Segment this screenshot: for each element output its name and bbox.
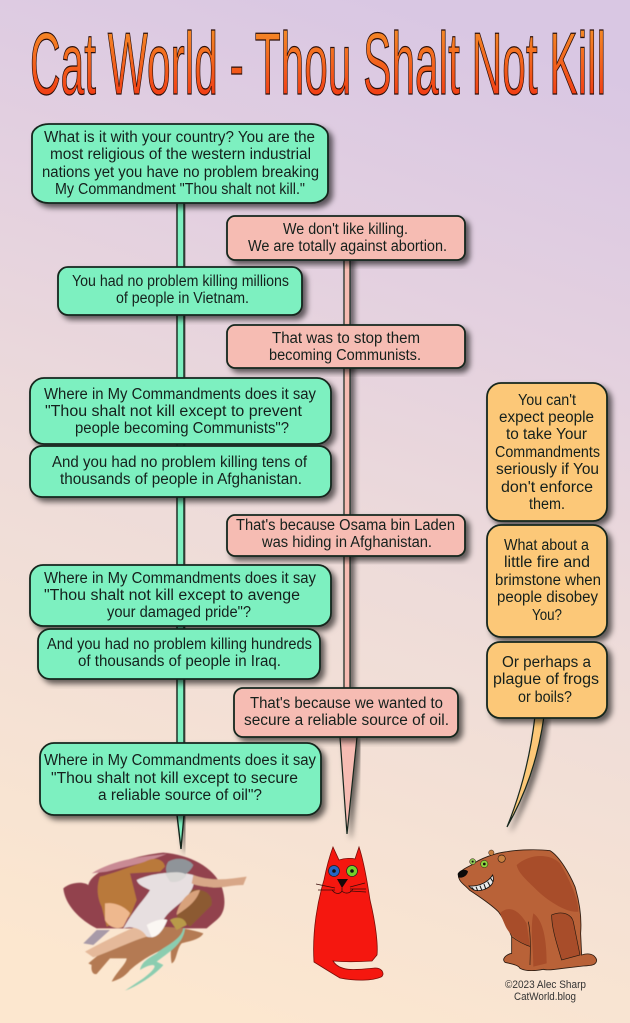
illustration: God in red cloak (63, 853, 247, 991)
bubble: Vietnam: You had no problem killing millions (72, 273, 289, 290)
bubble: stop them becoming Communists: becoming Communists. (269, 347, 421, 364)
bubble: prevent people becoming Communists: "Thou shalt not kill except to prevent (45, 403, 303, 420)
bubble: frogs or boils: Or perhaps a (502, 654, 591, 671)
green scarf (125, 928, 185, 991)
bubble: fire and brimstone: brimstone when (495, 572, 601, 589)
bear grin (469, 875, 493, 891)
bubble: Iraq (38, 629, 320, 679)
bubble: Vietnam: of people in Vietnam. (116, 290, 249, 307)
bubble: source of oil: That's because we wanted to (250, 695, 443, 712)
bubble: secure source of oil (40, 743, 321, 815)
bubble: stop them becoming Communists (227, 325, 465, 368)
illustration: brown bear (458, 850, 597, 971)
bubble: enforce commandments: seriously if You (496, 461, 599, 478)
bubble: what is it with your country (32, 124, 328, 203)
bubble: prevent people becoming Communists: Where in My Commandments does it say (44, 386, 316, 403)
bubble: avenge damaged pride (30, 565, 331, 626)
bubble: fire and brimstone: What about a (504, 537, 589, 554)
bubble: avenge damaged pride: "Thou shalt not kill except to avenge (44, 587, 300, 604)
bubble: we don't like killing: We are totally against abortion. (248, 238, 447, 255)
bubble: what is it with your country: My Commandment "Thou shalt not kill." (55, 181, 305, 198)
bubble: enforce commandments: don't enforce (501, 479, 593, 496)
bubble: prevent people becoming Communists (30, 378, 331, 444)
bubble: enforce commandments: them. (529, 496, 565, 513)
bubble: fire and brimstone (487, 525, 607, 637)
bear nose (458, 870, 468, 878)
bubble: avenge damaged pride: Where in My Commandments does it say (44, 570, 316, 587)
bubble: what is it with your country: most religious of the western industrial (50, 146, 311, 163)
bubble: source of oil: secure a reliable source of oil. (244, 712, 449, 729)
bubble: Iraq: And you had no problem killing hundreds (47, 636, 312, 653)
bubble: we don't like killing (227, 216, 465, 260)
illustration: red cat (314, 847, 383, 980)
credit (505, 979, 586, 1003)
bubble: what is it with your country: nations yet you have no problem breaking (42, 164, 319, 181)
bubble: Vietnam (58, 267, 302, 315)
bubble: fire and brimstone: You? (532, 607, 562, 624)
bubble: what is it with your country: What is it with your country? You are the (44, 129, 315, 146)
bubble: fire and brimstone: little fire and (504, 554, 590, 571)
bubble: enforce commandments: to take Your (506, 426, 587, 443)
cherubs (98, 859, 165, 927)
bubble: secure source of oil: "Thou shalt not kill except to secure (51, 770, 298, 787)
bear eyes and ears (470, 859, 476, 865)
bubble: Afghanistan: thousands of people in Afghanistan. (60, 471, 302, 488)
cloak (63, 853, 224, 928)
bubble: enforce commandments: Commandments (495, 444, 600, 461)
bubble: enforce commandments: You can't (518, 392, 577, 409)
bubble: avenge damaged pride: your damaged pride"? (107, 604, 251, 621)
cat nose and whiskers (337, 879, 348, 888)
bubble: secure source of oil: Where in My Commandments does it say (44, 752, 316, 769)
bubble: prevent people becoming Communists: people becoming Communists"? (75, 420, 289, 437)
bubble: Iraq: of thousands of people in Iraq. (78, 653, 281, 670)
head and beard (166, 859, 193, 879)
cat eyes (328, 866, 340, 876)
bubble: Osama bin Laden: was hiding in Afghanistan. (261, 534, 432, 551)
credit: ©2023 Alec Sharp (505, 979, 586, 991)
bubble: frogs or boils: plague of frogs (493, 671, 599, 688)
bubble: enforce commandments: expect people (499, 409, 594, 426)
bubble: frogs or boils (487, 642, 607, 718)
bubble: enforce commandments (487, 383, 607, 521)
arm (192, 875, 247, 888)
bubble: Afghanistan (30, 446, 331, 497)
bubble: Osama bin Laden: That's because Osama bin Laden (236, 517, 455, 534)
bubble: secure source of oil: a reliable source of oil"? (98, 787, 262, 804)
bubble: fire and brimstone: people disobey (497, 589, 598, 606)
speech tails: pink column (340, 255, 357, 834)
credit: CatWorld.blog (514, 991, 576, 1003)
bubble: Afghanistan: And you had no problem killing tens of (52, 454, 308, 471)
bubble: Osama bin Laden (227, 515, 465, 556)
bubble: source of oil (234, 688, 458, 737)
lower body and legs (87, 927, 203, 982)
speech tail: orange column (507, 716, 544, 827)
bubble: stop them becoming Communists: That was to stop them (272, 330, 420, 347)
white robe (123, 873, 194, 937)
bubble: we don't like killing: We don't like killing. (283, 221, 408, 238)
speech tails: green column (177, 200, 184, 849)
bubble: frogs or boils: or boils? (518, 689, 572, 706)
